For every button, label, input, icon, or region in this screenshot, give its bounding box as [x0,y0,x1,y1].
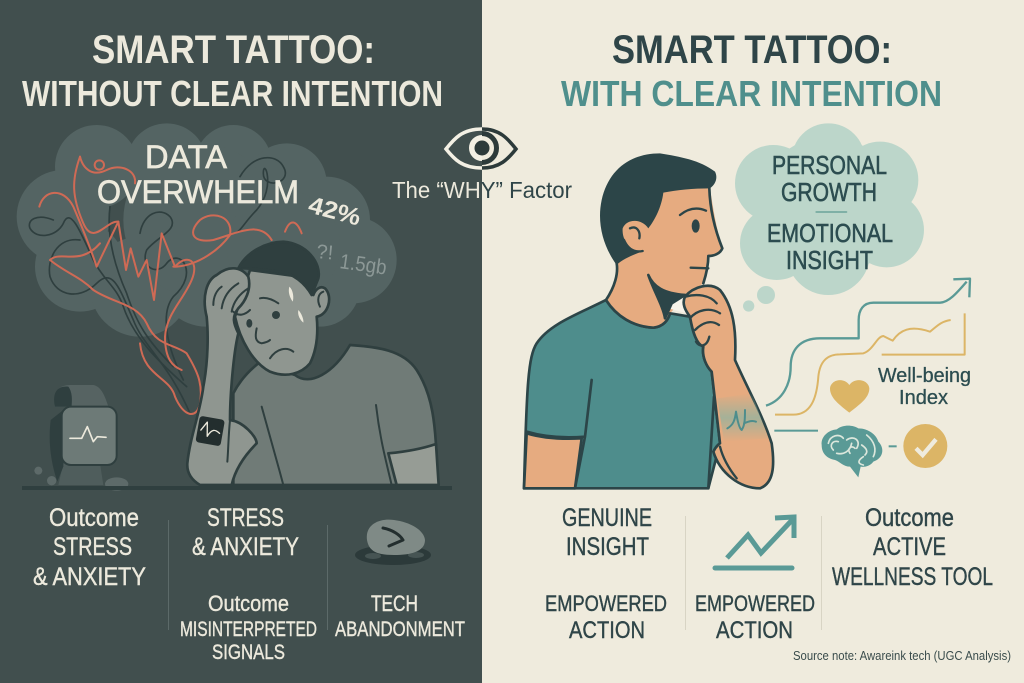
figure: thoughtful man [524,153,773,488]
divider in cloud [815,211,847,213]
head [235,270,329,375]
cloud text [767,152,893,275]
cloud label: OVERWHELM [97,174,299,210]
thought cloud: personal growth [735,123,924,312]
arm and hand [684,286,773,488]
icon: brain [822,426,882,477]
the why factor label: The “WHY” Factor [392,177,572,203]
insight column: ACTION [569,617,645,644]
outcome column 1: & ANXIETY [33,563,146,591]
outcome column 2: SIGNALS [212,641,285,664]
cloud text: INSIGHT [786,247,873,275]
upper arm [524,433,582,488]
icon: rising trend [715,517,794,568]
chart: teal growth line [766,279,970,406]
dark scribbles [29,158,285,413]
hair [238,242,319,295]
data fragments: ?! [316,241,334,264]
data fragments: 1.5gb [338,250,388,279]
outcome column 1 [33,504,146,591]
face details [256,292,323,358]
heading: without clear intention: WITHOUT CLEAR INTENTION [22,73,443,114]
outcome column 1: STRESS [53,533,132,561]
cloud text: EMOTIONAL [767,220,893,248]
outcome column 1: Outcome [49,504,139,532]
outcome column 2: Outcome [208,591,289,616]
insight column [545,504,667,644]
heading: without clear intention [22,28,443,114]
well-being index label [878,364,971,409]
outcome column: ACTIVE [873,533,946,561]
well-being index label: Index [899,386,949,409]
connector line [774,430,818,432]
shirt [233,345,437,485]
sleeve arm [388,444,439,485]
action column [695,591,815,644]
chart: gold growth line [775,313,965,415]
cloud text: PERSONAL [772,152,887,180]
heading: without clear intention: SMART TATTOO: [92,28,375,72]
cloud text: GROWTH [781,179,877,207]
icon: check circle [903,424,947,468]
icon: abandoned tattoo stone [355,520,431,565]
shirt [524,300,720,488]
insight column: GENUINE [562,504,652,532]
data fragments [305,192,388,279]
the why factor: eye icon [446,129,516,168]
insight column: INSIGHT [566,533,649,561]
outcome column: Outcome [865,504,954,532]
head and neck [606,188,722,328]
outcome column 3: TECH [371,591,418,616]
cloud label [97,139,299,210]
heading: with clear intention: WITH CLEAR INTENTION [561,73,942,114]
jaw shadow [648,275,685,318]
figure: stressed man [187,242,439,485]
collar gap [668,295,690,314]
dividers [168,520,169,630]
thought cloud: data overwhelm [17,123,397,414]
outcome column 2: MISINTERPRETED [180,618,317,641]
outcome column 2: STRESS [207,504,284,532]
outcome column [832,504,993,591]
heading: with clear intention [561,28,942,114]
sweat drops [289,287,303,323]
outcome column 3 [335,591,465,641]
forearm and hand [187,268,257,485]
desk line [22,486,452,490]
icon: arm tattoo [195,416,225,446]
outcome column 3: ABANDONMENT [335,618,465,641]
face details [624,209,708,268]
icon: smartwatch [34,385,128,491]
action column: ACTION [716,617,793,644]
red scribbles [39,157,302,414]
panel: without clear intention [0,0,482,683]
heading: with clear intention: SMART TATTOO: [612,28,892,72]
action column: EMPOWERED [695,591,815,616]
panel: with clear intention [524,28,1011,663]
insight column: EMPOWERED [545,591,667,616]
icon: glowing arm tattoo [717,393,768,442]
well-being index label: Well-being [878,364,971,387]
icon: heart [830,380,869,413]
hair [600,153,716,265]
dividers [685,516,686,630]
outcome column 2 [180,504,317,664]
data fragments: 42% [305,192,364,232]
outcome column 2: & ANXIETY [192,533,299,561]
cloud label: DATA [145,139,228,175]
